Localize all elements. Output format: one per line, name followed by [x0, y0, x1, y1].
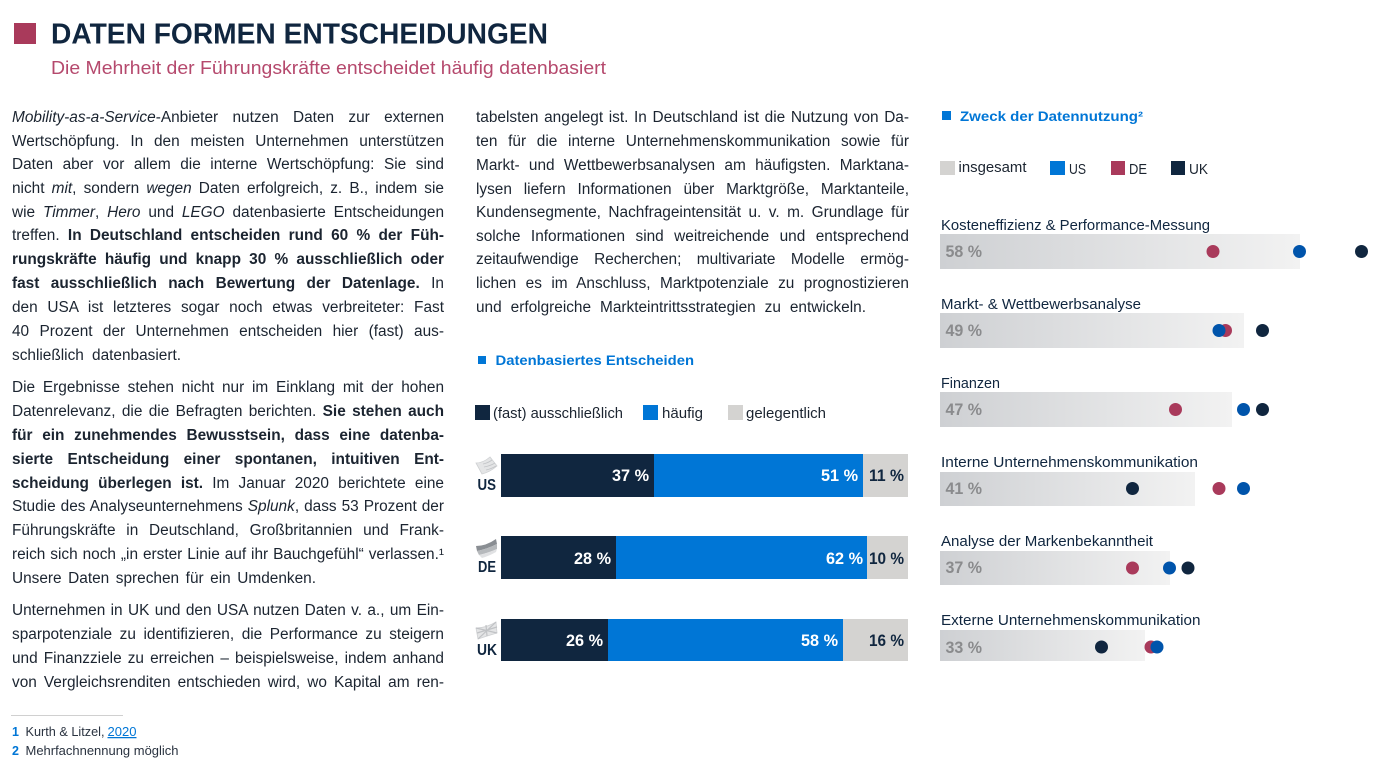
text block: left column body: Studie des Analyseunternehmens Splunk, dass 53 Prozent der	[12, 498, 444, 515]
panel: Zweck der Datennutzung dot chart	[940, 108, 1368, 661]
chart heading: Zweck der Datennutzung²	[960, 108, 1143, 124]
row: Interne Unternehmenskommunikation: Interne Unternehmenskommunikation	[941, 455, 1198, 471]
row: UK: 26 %	[566, 632, 603, 650]
row: DE: 10 %	[869, 550, 904, 568]
text block: left column body: scheidung überlegen ist. Im Januar 2020 berichtete eine	[12, 475, 444, 492]
text block: left column body: Führungskräfte in Deutschland, Großbritannien und Frank-	[12, 522, 444, 539]
row: US: US	[478, 477, 496, 494]
text block: left column body: wie Timmer, Hero und LEGO datenbasierte Entscheidungen	[12, 204, 444, 221]
text block: middle column body	[476, 109, 909, 316]
row: Markt- und Wettbewerbsanalyse	[940, 297, 1269, 348]
icon: DE flag	[476, 539, 497, 558]
legend: insgesamt	[958, 159, 1027, 176]
row: DE: 62 %	[826, 550, 863, 568]
footnotes: Kurth & Litzel,	[26, 725, 104, 739]
text block: left column body: den USA ist letzteres sogar noch etwas verbreiteter: Fast	[12, 299, 444, 316]
text block: middle column body: Kundensegmente, Nachfrageintensität u. v. m. Grundlage für	[476, 204, 909, 221]
row: DE: DE	[478, 559, 496, 576]
row: UK: 16 %	[869, 632, 904, 650]
text block: left column body: Unternehmen in UK und den USA nutzen Daten v. a., um Ein-	[12, 602, 444, 619]
footnotes: Mehrfachnennung möglich	[26, 744, 179, 758]
row: Finanzen	[940, 376, 1269, 427]
panel: Datenbasiertes Entscheiden stacked bars	[475, 352, 908, 661]
text block: middle column body: ten für die interne Unternehmenskommunikation sowie für	[476, 133, 909, 150]
row: DE: 28 %	[574, 550, 611, 568]
footnotes: 1	[12, 725, 19, 739]
row: Kosteneffizienz: Kosteneffizienz & Performance-Messung	[941, 218, 1210, 234]
legend	[475, 405, 826, 422]
legend: UK	[1189, 161, 1208, 178]
text block: left column body: für ein zunehmendes Bewusstsein, dass eine datenba-	[12, 427, 444, 444]
text block: middle column body: lichen es im Anschluss, Marktpotenziale zu prognostizieren	[476, 275, 909, 292]
text block: left column body: Die Ergebnisse stehen nicht nur im Einklang mit der hohen	[12, 379, 444, 396]
row: Interne Unternehmenskommunikation: 41 %	[946, 480, 982, 498]
text block: middle column body: solche Informationen sind weitreichende und entsprechend	[476, 228, 909, 245]
row: Kosteneffizienz	[940, 218, 1368, 269]
text block: left column body: 40 Prozent der Unternehmen entscheiden hier (fast) aus-	[12, 323, 444, 340]
icon: US flag	[476, 457, 497, 474]
row: Interne Unternehmenskommunikation	[940, 455, 1250, 506]
row: Finanzen: 47 %	[946, 401, 982, 419]
footnotes	[11, 715, 179, 758]
text block: middle column body: Markt- und Wettbewerbsanalysen am häufigsten. Marktana-	[476, 157, 909, 174]
text block: left column body: rungskräfte häufig und knapp 30 % ausschließlich oder	[12, 251, 444, 268]
legend: DE	[1129, 161, 1147, 178]
text block: middle column body: tabelsten angelegt ist. In Deutschland ist die Nutzung von Da-	[476, 109, 909, 126]
footnotes: 2020	[108, 725, 137, 739]
text block: middle column body: zeitaufwendige Recherchen; multivariate Modelle ermög-	[476, 251, 909, 268]
row: Markt- und Wettbewerbsanalyse: Markt- & Wettbewerbsanalyse	[941, 297, 1141, 313]
row: Kosteneffizienz: 58 %	[946, 243, 982, 261]
row: Markt- und Wettbewerbsanalyse: 49 %	[946, 322, 982, 340]
row: Analyse der Markenbekanntheit: Analyse der Markenbekanntheit	[941, 534, 1153, 550]
row: US: 11 %	[869, 467, 904, 485]
text block: left column body: Datenrelevanz, die die Befragten berichten. Sie stehen auch	[12, 403, 444, 420]
row: Analyse der Markenbekanntheit	[940, 534, 1194, 585]
row: Externe Unternehmenskommunikation: 33 %	[946, 639, 982, 657]
text block: left column body: fast ausschließlich nach Bewertung der Datenlage. In	[12, 275, 444, 292]
footnotes: 2	[12, 744, 19, 758]
chart heading marker	[478, 356, 486, 364]
row: Analyse der Markenbekanntheit: 37 %	[946, 559, 982, 577]
text block: left column body: Mobility-as-a-Service-Anbieter nutzen Daten zur externen	[12, 109, 444, 126]
row: US: 37 %	[612, 467, 649, 485]
text block: left column body: Daten aber vor allem die interne Wertschöpfung: Sie sind	[12, 156, 444, 173]
text block: left column body: nicht mit, sondern wegen Daten erfolgreich, z. B., indem sie	[12, 180, 444, 197]
text block: left column body: reich sich noch „in erster Linie auf ihr Bauchgefühl“ verlassen.¹	[12, 546, 444, 563]
title: DATEN FORMEN ENTSCHEIDUNGEN	[51, 18, 548, 50]
icon: UK flag	[476, 622, 497, 639]
text block: left column body: Unsere Daten sprechen für ein Umdenken.	[12, 570, 316, 587]
text block: middle column body: lysen liefern Informationen über Marktgröße, Marktanteile,	[476, 181, 909, 198]
legend	[940, 159, 1208, 178]
legend: gelegentlich	[746, 405, 826, 422]
row: Externe Unternehmenskommunikation: Externe Unternehmenskommunikation	[941, 613, 1200, 629]
row: Externe Unternehmenskommunikation	[940, 613, 1200, 661]
text block: left column body: sierte Entscheidung einer spontanen, intuitiven Ent-	[12, 451, 444, 468]
row: UK: 58 %	[801, 632, 838, 650]
text block: left column body: Wertschöpfung. In den meisten Unternehmen unterstützen	[12, 133, 444, 150]
text block: left column body: schließlich datenbasiert.	[12, 347, 181, 364]
row: UK	[476, 619, 908, 661]
text block: left column body	[12, 109, 444, 691]
text block: left column body: sparpotenziale zu identifizieren, die Performance zu steigern	[12, 626, 444, 643]
chart heading marker	[942, 111, 951, 120]
subtitle: Die Mehrheit der Führungskräfte entscheidet häufig datenbasiert	[51, 57, 606, 78]
row: DE	[476, 536, 908, 579]
legend: (fast) ausschließlich	[493, 405, 623, 422]
text block: left column body: von Vergleichsrenditen entschieden wird, wo Kapital am ren-	[12, 674, 444, 691]
title marker	[14, 23, 36, 44]
row: US	[476, 454, 908, 497]
chart heading: Datenbasiertes Entscheiden	[496, 352, 694, 368]
text block: left column body: treffen. In Deutschland entscheiden rund 60 % der Füh-	[12, 227, 444, 244]
row: Finanzen: Finanzen	[941, 376, 1000, 392]
text block: middle column body: und erfolgreiche Markteintrittsstrategien zu entwickeln.	[476, 299, 866, 316]
row: UK: UK	[477, 642, 497, 659]
legend: US	[1069, 161, 1086, 178]
row: US: 51 %	[821, 467, 858, 485]
legend: häufig	[662, 405, 703, 422]
text block: left column body: und Finanzziele zu erreichen – beispielsweise, indem anhand	[12, 650, 444, 667]
